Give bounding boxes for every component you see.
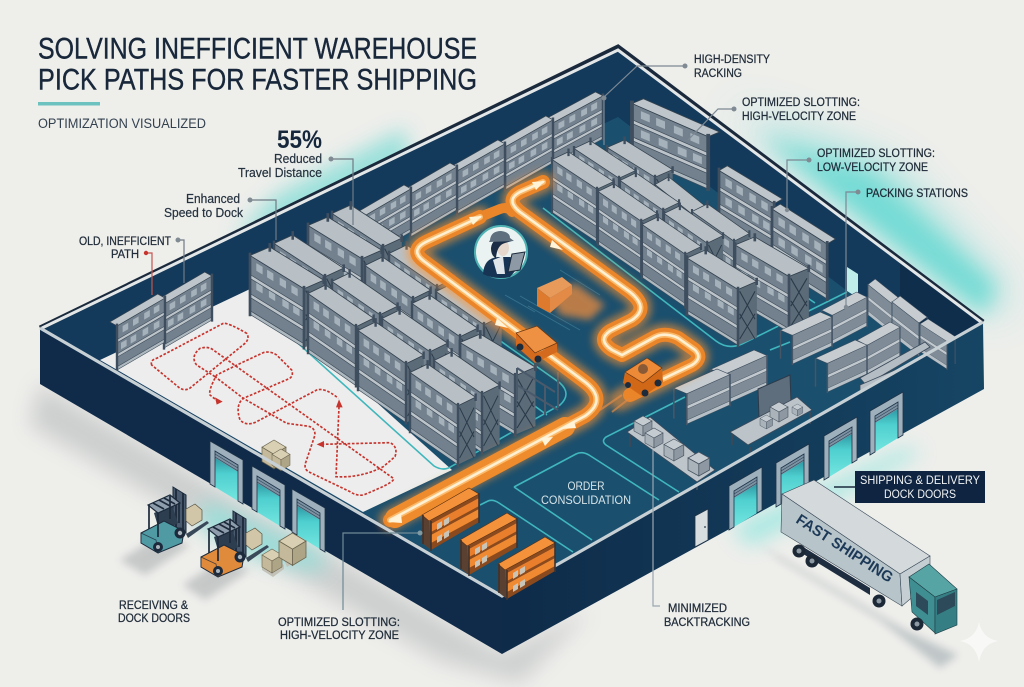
thin rack frame xyxy=(517,368,558,415)
callout: 55% reduced travel distance: 55% xyxy=(277,126,322,154)
callout: high-density racking xyxy=(602,54,770,145)
receiving dock doors xyxy=(210,441,325,552)
forklift: teal xyxy=(120,487,209,575)
callout: minimized backtracking xyxy=(653,450,750,629)
forklift: orange xyxy=(183,511,269,600)
orange high-velocity racks xyxy=(422,488,555,600)
label: receiving and dock doors xyxy=(118,600,190,625)
subtitle: OPTIMIZATION VISUALIZED xyxy=(38,116,206,131)
callout: enhanced speed to dock: Enhanced xyxy=(186,192,240,206)
low shelves by right wall xyxy=(860,342,930,393)
teal floor zone lines xyxy=(250,208,847,552)
callout: packing stations xyxy=(844,188,968,310)
truck lettering: FAST SHIPPING xyxy=(793,511,896,586)
optimized pick path (glowing orange) xyxy=(390,182,698,520)
callout: high-velocity zone lower: OPTIMIZED SLOTTING: xyxy=(278,617,400,629)
rack row: back-left wall xyxy=(357,92,603,261)
floor: light old zone xyxy=(100,289,452,512)
label: receiving and dock doors: RECEIVING & xyxy=(119,600,188,612)
callout: packing stations: PACKING STATIONS xyxy=(866,188,968,200)
callout: high-velocity zone upper xyxy=(688,97,860,140)
floor: dark zone xyxy=(100,117,929,594)
packing racks xyxy=(674,279,955,425)
old inefficient path (red dashed) xyxy=(151,323,396,495)
darker wall panel near right corner xyxy=(900,260,980,345)
callout: old inefficient path xyxy=(79,236,184,295)
AGV robot 2 xyxy=(600,358,663,412)
label: order consolidation: ORDER xyxy=(568,481,604,493)
callout: high-density racking: HIGH-DENSITY xyxy=(694,54,770,66)
callout: enhanced speed to dock: Speed to Dock xyxy=(164,206,244,220)
moving parcel with motion trail xyxy=(505,270,605,330)
callout: 55% reduced travel distance: Reduced xyxy=(274,152,322,166)
callout: minimized backtracking: MINIMIZED xyxy=(668,603,727,615)
callout: high-velocity zone lower: HIGH-VELOCITY ZONE xyxy=(280,630,399,642)
building: outer walls xyxy=(40,322,984,654)
label: shipping and delivery dock doors: SHIPPING & DELIVERY xyxy=(860,475,980,487)
teal glow on ground: shipping doors xyxy=(732,448,922,546)
callout: low-velocity zone: LOW-VELOCITY ZONE xyxy=(817,162,928,174)
path arrowheads xyxy=(388,181,576,523)
title: PICK PATHS FOR FASTER SHIPPING xyxy=(38,64,477,96)
callout: high-velocity zone lower xyxy=(278,530,422,642)
callout: enhanced speed to dock xyxy=(164,192,276,240)
callout: 55% reduced travel distance: Travel Distance xyxy=(238,166,322,180)
callout: high-velocity zone upper: OPTIMIZED SLOTTING: xyxy=(742,97,860,109)
personnel door xyxy=(695,509,708,547)
title xyxy=(38,32,477,96)
callout: high-velocity zone upper: HIGH-VELOCITY ZONE xyxy=(742,111,856,123)
label: receiving and dock doors: DOCK DOORS xyxy=(118,613,190,625)
truck xyxy=(760,480,958,668)
rack pair: old zone xyxy=(110,272,212,372)
label: shipping and delivery dock doors: DOCK DOORS xyxy=(884,489,956,501)
label: order consolidation xyxy=(541,481,631,507)
teal glow on ground: receiving doors xyxy=(198,500,325,572)
pale wall door xyxy=(847,267,858,298)
rack block: middle left xyxy=(250,201,535,467)
shipping dock doors xyxy=(729,392,903,530)
building: interior back walls xyxy=(40,47,983,597)
callout: 55% reduced travel distance xyxy=(238,126,353,225)
ground shadow under front walls xyxy=(30,384,590,682)
callout: old inefficient path: OLD, INEFFICIENT xyxy=(79,236,171,248)
callout: old inefficient path: PATH xyxy=(111,249,139,261)
callout: low-velocity zone: OPTIMIZED SLOTTING: xyxy=(817,148,935,160)
AGV robot 1 xyxy=(516,326,557,363)
teal glow: behind back-left wall xyxy=(232,128,410,238)
callout: minimized backtracking: BACKTRACKING xyxy=(664,617,750,629)
worker icon xyxy=(475,226,527,278)
packing table with screen xyxy=(730,375,812,455)
title: SOLVING INEFFICIENT WAREHOUSE xyxy=(38,32,477,66)
label: order consolidation: CONSOLIDATION xyxy=(541,495,631,507)
callout: high-density racking: RACKING xyxy=(694,68,742,80)
rim xyxy=(40,47,983,596)
title accent bar xyxy=(38,102,100,106)
sparkle watermark xyxy=(960,622,998,662)
pallets of boxes xyxy=(262,533,307,577)
teal glow: behind back-right wall xyxy=(730,110,1010,315)
callout: low-velocity zone xyxy=(785,148,935,212)
pallet on old floor xyxy=(262,440,290,471)
rack block: high-velocity zone upper right xyxy=(552,99,835,347)
label: shipping and delivery dock doors xyxy=(834,471,985,503)
consolidation table with boxes xyxy=(627,416,715,490)
